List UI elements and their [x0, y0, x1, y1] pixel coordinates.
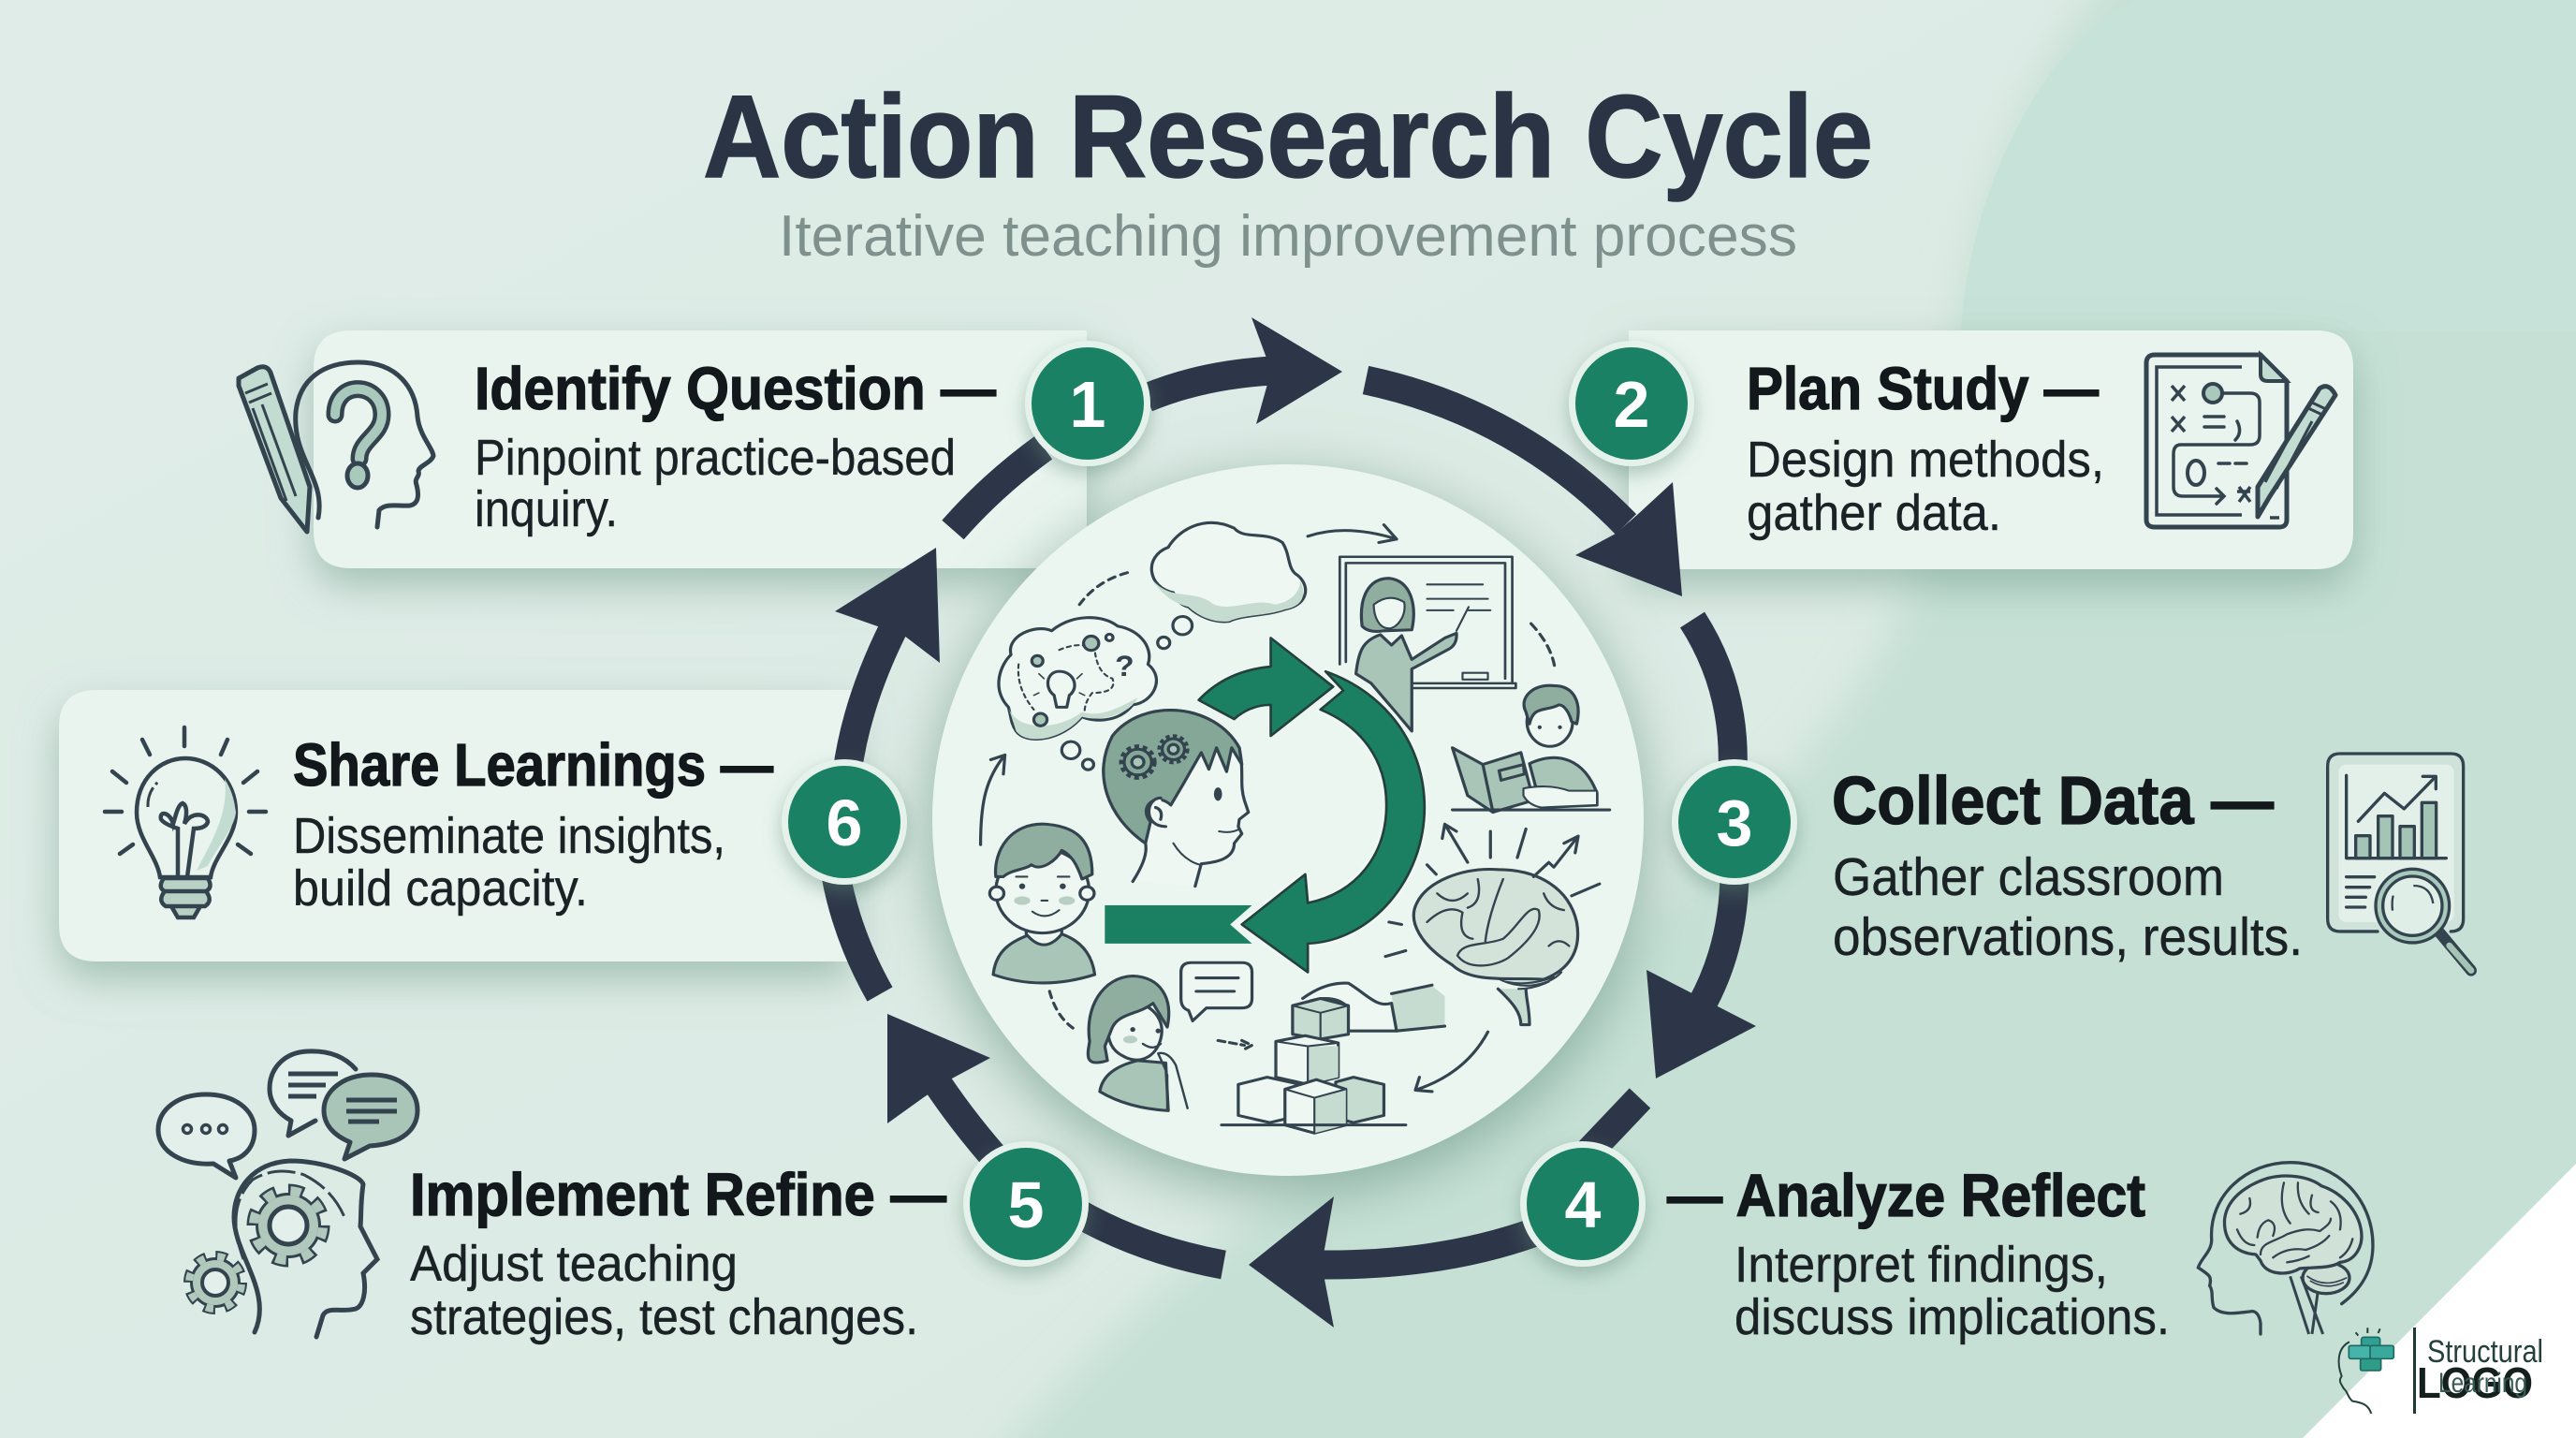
- brain with arrows: [1385, 824, 1600, 1025]
- cloud: [1079, 522, 1397, 622]
- logo wordmark: Structural: Structural: [2427, 1334, 2543, 1370]
- arrow: step 3 to 4: [1588, 620, 1756, 1153]
- central child head in profile: [1104, 711, 1249, 887]
- arrow: step 2 to 3: [1366, 380, 1682, 596]
- badge 2: [1569, 341, 1694, 466]
- step 5 text: Adjust teaching: [410, 1236, 738, 1292]
- step 3 text: observations, results.: [1833, 907, 2303, 967]
- thought cloud: ?: [1115, 649, 1134, 682]
- boy reading: [1453, 685, 1610, 813]
- step 4 text: [1667, 1162, 2170, 1345]
- icon: chart report with magnifier: [2328, 754, 2471, 971]
- step 6 text: [293, 731, 773, 917]
- step 4 text: discuss implications.: [1734, 1289, 2170, 1345]
- step 1 text: inquiry.: [475, 481, 618, 537]
- step 3 text: Collect Data —: [1832, 764, 2274, 839]
- step 1 text: Pinpoint practice-based: [475, 430, 956, 486]
- badge 3: 3: [1717, 786, 1752, 859]
- badge 4: [1520, 1141, 1646, 1267]
- step 6 text: build capacity.: [293, 860, 588, 917]
- title: Action Research Cycle: [703, 72, 1873, 202]
- panel: step 6 card: [59, 690, 852, 961]
- badge 6: 6: [827, 786, 862, 859]
- subtitle: Iterative teaching improvement process: [779, 204, 1797, 269]
- step 1 text: [475, 355, 996, 537]
- badge 3: [1672, 759, 1797, 885]
- boy face: [981, 755, 1095, 1028]
- logo wordmark: Learning: Learning: [2438, 1368, 2527, 1399]
- badge 2: 2: [1614, 368, 1649, 441]
- teacher at board: [1339, 557, 1515, 731]
- step 5 text: [410, 1161, 946, 1345]
- icon: speech bubbles and head with gears: [158, 1051, 417, 1337]
- step 5 text: Implement Refine —: [410, 1161, 946, 1228]
- icon: study plan document and pencil: [2146, 355, 2335, 527]
- step 6 text: Disseminate insights,: [293, 808, 725, 864]
- logo mark: head and blocks: [2339, 1328, 2393, 1414]
- step 1 text: Identify Question —: [475, 355, 996, 422]
- step 2 text: gather data.: [1747, 485, 2001, 541]
- logo wordmark: LOGO: LOGO: [2417, 1358, 2533, 1407]
- thought cloud: [999, 616, 1193, 770]
- icon: light bulb: [105, 727, 266, 917]
- step 4 text: Interpret findings,: [1734, 1237, 2108, 1293]
- badge 1: 1: [1070, 368, 1105, 441]
- step 6 text: Share Learnings —: [293, 731, 773, 799]
- arrow: step 4 to 5: [1076, 1196, 1535, 1328]
- arrow: step 6 to 1: [835, 448, 1044, 994]
- green cycle arrows: [1105, 638, 1425, 972]
- panel: step 2 card: [1629, 330, 2353, 569]
- arrow: step 1 to 2: [1147, 317, 1342, 424]
- icon: brain in head profile: [2198, 1163, 2373, 1334]
- badge 5: 5: [1008, 1168, 1044, 1241]
- center illustration: [981, 522, 1610, 1133]
- cycle arrows: [835, 317, 1756, 1328]
- step 2 text: Design methods,: [1747, 432, 2104, 488]
- step 2 text: Plan Study —: [1747, 355, 2099, 422]
- step 4 text: — Analyze Reflect: [1667, 1162, 2145, 1229]
- step 3 text: [1832, 764, 2303, 967]
- badge 1: [1025, 341, 1150, 466]
- center illustration disc: [932, 464, 1644, 1176]
- arrow: step 5 to 6: [887, 1014, 1002, 1166]
- building blocks and hand: [1222, 624, 1555, 1133]
- step 2 text: [1747, 355, 2104, 541]
- icon: pencil and question head: [239, 362, 433, 532]
- girl with speech bubble: [1088, 962, 1252, 1110]
- logo divider: [2413, 1328, 2416, 1414]
- panel: step 1 card: [314, 330, 1087, 568]
- step 3 text: Gather classroom: [1833, 847, 2224, 907]
- badge 6: [782, 759, 907, 885]
- badge 5: [963, 1141, 1089, 1267]
- badge 4: 4: [1565, 1168, 1602, 1241]
- logo: [2339, 1328, 2543, 1414]
- step 5 text: strategies, test changes.: [410, 1289, 918, 1345]
